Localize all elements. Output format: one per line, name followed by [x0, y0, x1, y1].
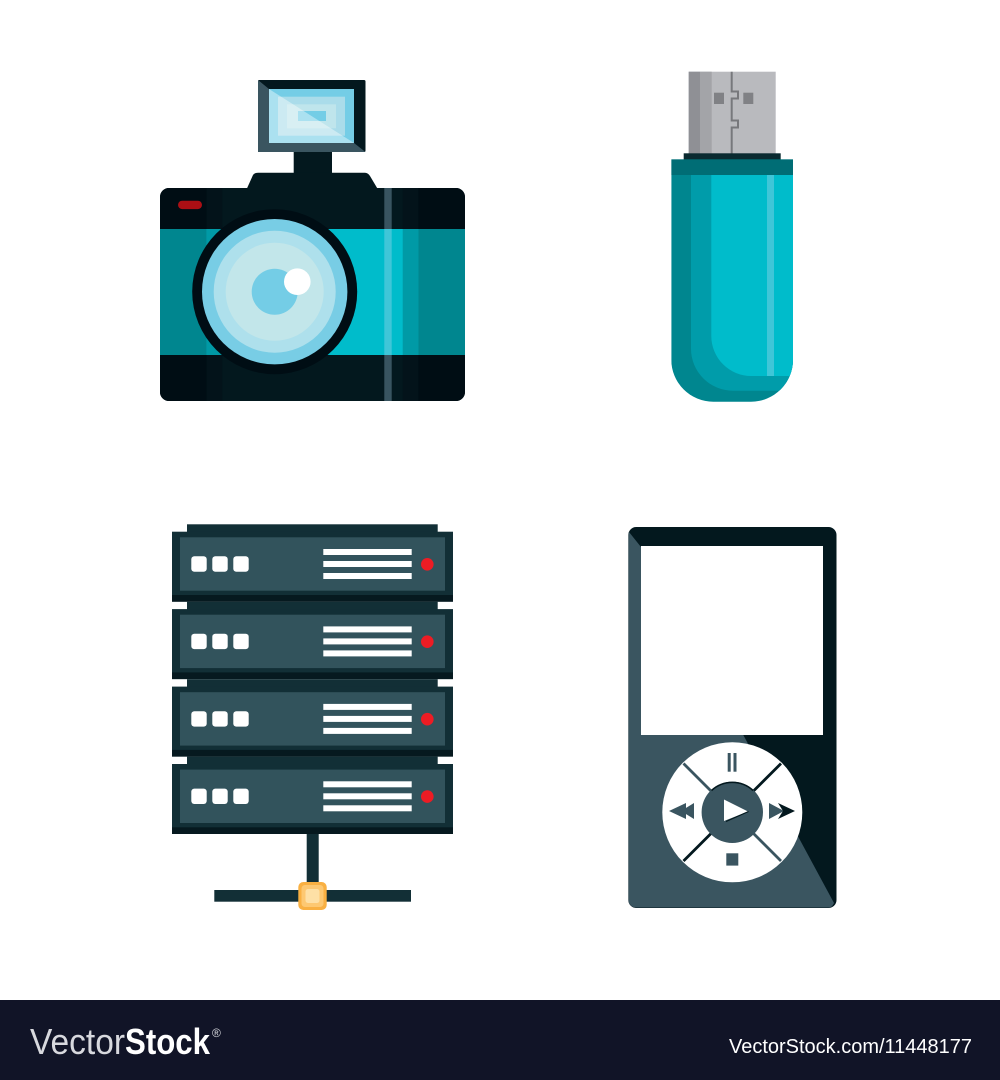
usb metal connector [689, 72, 776, 154]
player control wheel [662, 742, 802, 882]
play button [702, 782, 763, 843]
player screen [641, 546, 823, 735]
camera indicator light [178, 201, 202, 209]
camera body [160, 188, 465, 401]
registered mark: ® [212, 1026, 221, 1040]
stop symbol [726, 853, 738, 866]
icon: music player [628, 527, 836, 908]
camera flash unit [258, 80, 366, 176]
brand logo text: Stock [125, 1021, 211, 1062]
brand logo text: Vector [30, 1021, 125, 1062]
server unit 1 [172, 524, 453, 602]
server unit 2 [172, 602, 453, 679]
pause symbol [728, 753, 736, 772]
fast forward symbol [769, 803, 795, 819]
icon: camera [160, 80, 465, 401]
camera teal band [160, 229, 465, 355]
player casing [628, 527, 836, 908]
brand logo text [30, 1021, 211, 1062]
server unit 3 [172, 679, 453, 757]
wheel dividers [684, 764, 781, 861]
camera top plate [247, 173, 378, 190]
camera lens [192, 209, 357, 374]
stock id text: VectorStock.com/11448177 [729, 1036, 972, 1058]
usb body [671, 159, 793, 402]
network connector [214, 834, 411, 910]
usb collar [684, 153, 781, 160]
footer band [0, 1000, 1000, 1080]
icon: usb flash drive [671, 72, 793, 402]
server unit 4 [172, 757, 453, 834]
icon: server rack [172, 524, 453, 910]
rewind symbol [669, 803, 694, 819]
